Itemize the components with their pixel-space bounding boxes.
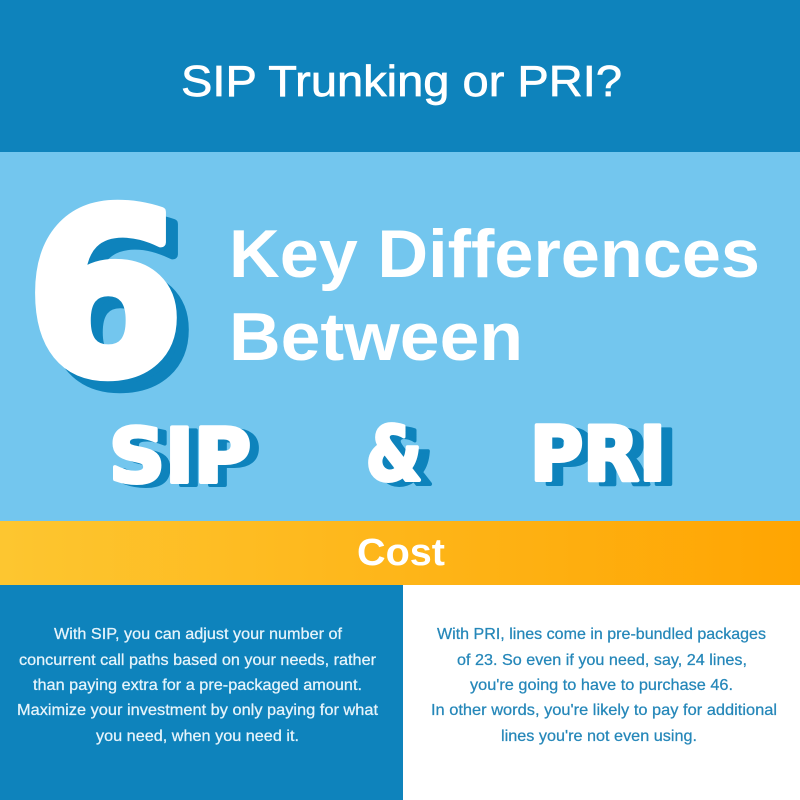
title: SIP Trunking or PRI? — [181, 57, 622, 106]
SIP description: Maximize your investment by only paying for what — [17, 702, 379, 719]
heading: key differences: Key Differences — [229, 216, 760, 292]
banner heading: Cost — [357, 532, 445, 574]
SIP description: concurrent call paths based on your needs, rather — [19, 652, 377, 669]
PRI description: you're going to have to purchase 46. — [470, 677, 733, 694]
label: PRI: PRI — [541, 414, 677, 502]
label: SIP: SIP — [109, 412, 251, 500]
PRI description: of 23. So even if you need, say, 24 lines, — [457, 652, 747, 669]
label: SIP: SIP — [118, 415, 260, 503]
panel: header — [0, 0, 800, 152]
banner: cost — [0, 521, 800, 585]
label: ampersand: & — [366, 410, 422, 498]
panel: PRI cost — [403, 585, 800, 800]
heading: key differences — [229, 216, 760, 375]
panel: hero — [0, 152, 800, 521]
PRI description: In other words, you're likely to pay for additional — [431, 702, 777, 719]
SIP description — [17, 626, 379, 745]
PRI description — [431, 626, 777, 745]
SIP description: With SIP, you can adjust your number of — [54, 626, 343, 643]
label: PRI: PRI — [530, 410, 666, 498]
big number 6: 6 — [26, 162, 184, 427]
big number 6: 6 — [38, 174, 196, 439]
PRI description: lines you're not even using. — [501, 728, 697, 745]
panel: SIP cost — [0, 585, 403, 800]
SIP description: than paying extra for a pre-packaged amount. — [33, 677, 362, 694]
heading: key differences: Between — [229, 299, 523, 375]
label: ampersand: & — [377, 414, 433, 502]
SIP description: you need, when you need it. — [96, 728, 299, 745]
PRI description: With PRI, lines come in pre-bundled packages — [437, 626, 766, 643]
